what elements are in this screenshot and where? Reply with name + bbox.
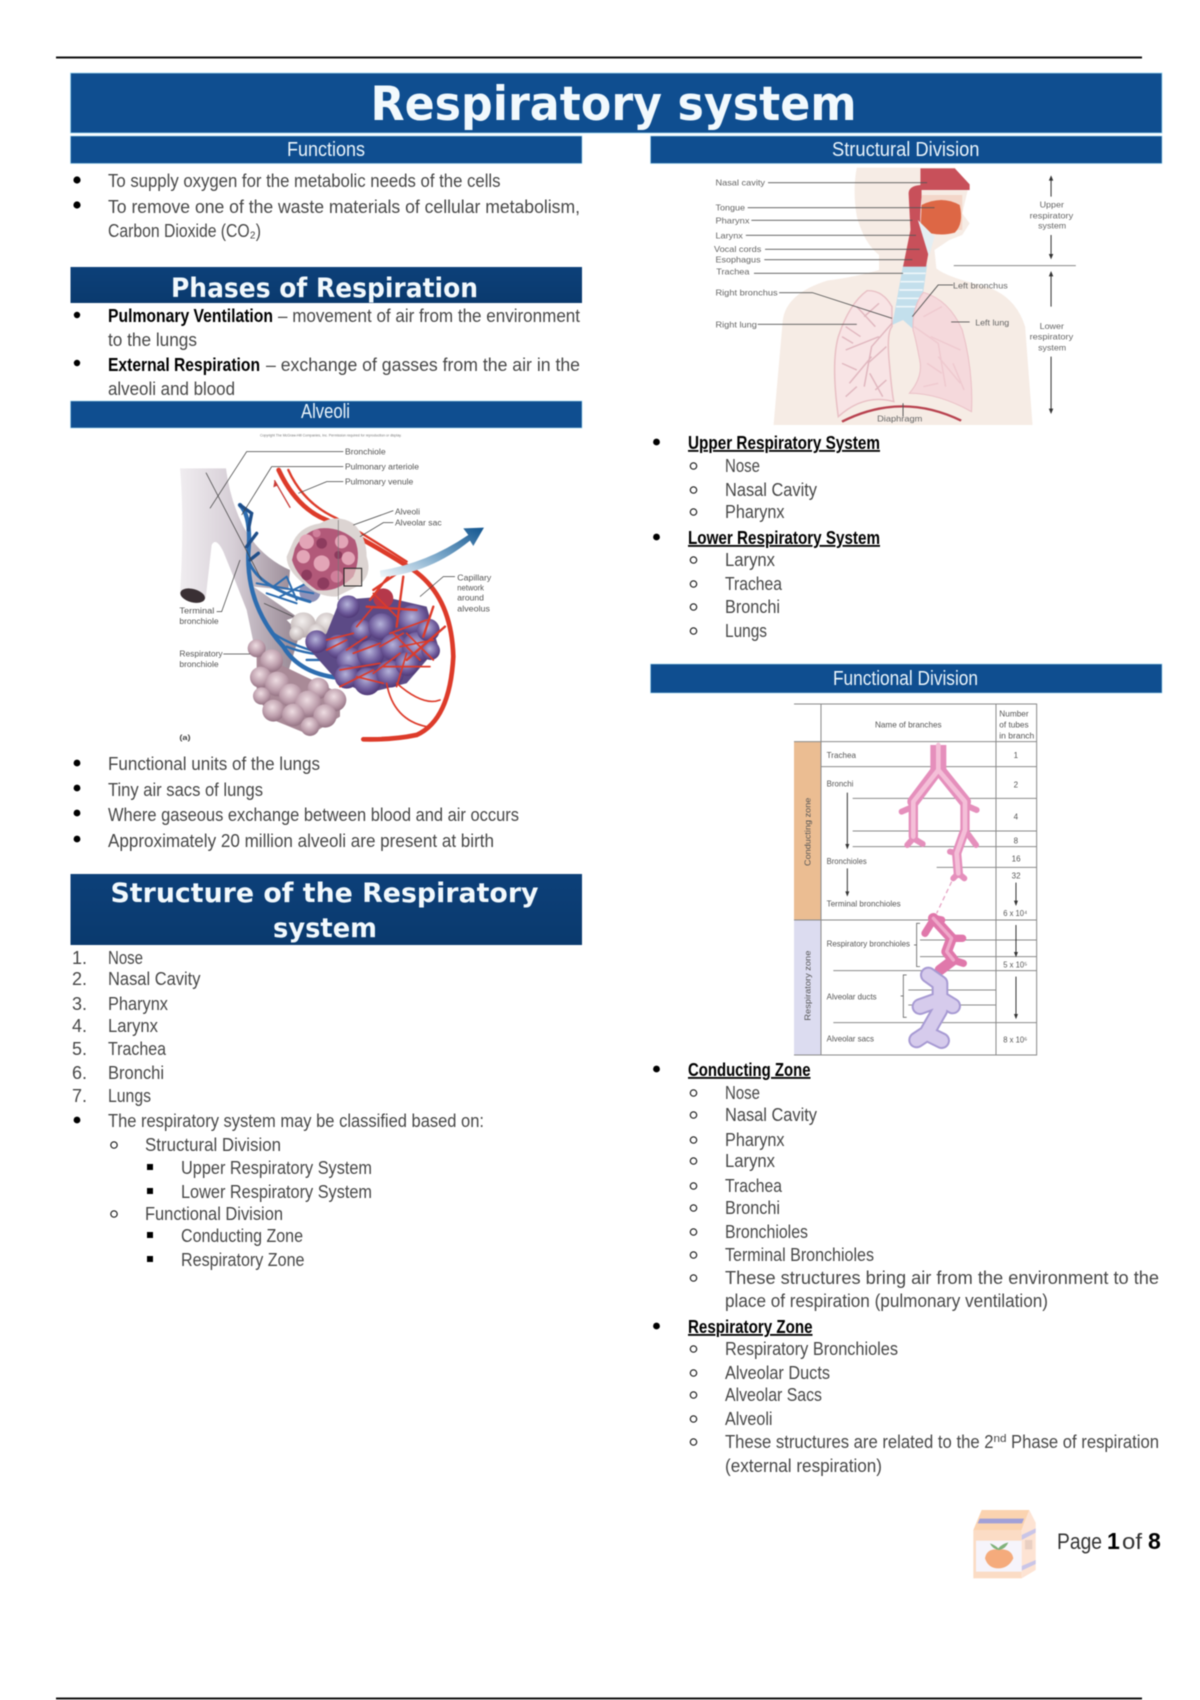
diagram labels: Vocal cords: [714, 244, 762, 254]
numbered list of organs: Nasal Cavity: [108, 969, 200, 989]
conducting zone list: place of respiration (pulmonary ventilation): [725, 1291, 1048, 1311]
respiratory zone list: These structures are related to the 2: [725, 1432, 994, 1452]
table labels: in branch: [999, 731, 1034, 740]
upper and lower respiratory system list: [653, 433, 880, 641]
conducting zone list: Trachea: [725, 1176, 783, 1196]
upper and lower respiratory system list: Nose: [725, 456, 760, 476]
numbered list of organs: 5.: [72, 1039, 87, 1059]
numbered list of organs: 1.: [72, 948, 87, 968]
panel: phases of respiration: [70, 267, 582, 399]
conducting zone list: Pharynx: [725, 1130, 784, 1150]
diagram labels: Left lung: [975, 318, 1009, 327]
panel: functional division: [650, 664, 1162, 1476]
diagram labels: Left bronchus: [953, 281, 1008, 291]
alveoli bullet list: Approximately 20 million alveoli are present at birth: [108, 831, 494, 851]
panel: functions: [70, 136, 582, 241]
table labels: 32: [1012, 872, 1021, 881]
light alveolar sac: [289, 581, 353, 643]
numbered list of organs: 2.: [72, 969, 87, 989]
table labels: 6 x 10⁴: [1003, 909, 1028, 918]
diagram labels: [714, 178, 1074, 423]
leader lines: [206, 452, 455, 654]
numbered list of organs: Bronchi: [108, 1063, 164, 1083]
table labels: 2: [1014, 780, 1019, 789]
alveoli bullet list: Where gaseous exchange between blood and air occurs: [108, 805, 519, 825]
heading: alveoli: [70, 401, 582, 428]
diagram labels: (a): [179, 733, 191, 742]
respiratory zone list: Alveolar Ducts: [725, 1363, 830, 1383]
table labels: 8 x 10⁶: [1003, 1036, 1027, 1045]
table labels: Alveolar sacs: [827, 1034, 875, 1044]
diagram labels: Upper: [1040, 200, 1064, 210]
conducting zone list: Larynx: [725, 1151, 775, 1171]
heading: structural division: Structural Division: [832, 139, 980, 161]
diagram labels: respiratory: [1030, 332, 1074, 341]
diagram labels: Tongue: [715, 203, 745, 212]
respiratory zone list: Alveoli: [725, 1409, 772, 1429]
heading: structure of the respiratory system: Structure of the Respiratory: [110, 878, 539, 909]
table labels: 5 x 10⁵: [1003, 960, 1027, 969]
capillary covered alveoli: [305, 588, 440, 695]
classification outline: Respiratory Zone: [181, 1250, 304, 1270]
respiratory zone list: Respiratory Zone: [688, 1317, 812, 1337]
heading: functional division: Functional Division: [833, 668, 978, 690]
diagram labels: Lower: [1040, 321, 1064, 331]
table labels: Name of branches: [875, 720, 942, 730]
table labels: Respiratory bronchioles: [827, 939, 911, 949]
upper and lower respiratory system list: Upper Respiratory System: [688, 433, 880, 453]
diagram labels: Alveolar sac: [395, 519, 442, 528]
diagram labels: Esophagus: [715, 255, 761, 264]
bottom page rule: [56, 1698, 1142, 1700]
table labels: Respiratory zone: [804, 950, 813, 1021]
functions bullet list: [73, 171, 580, 241]
diagram labels: [179, 448, 491, 742]
diagram labels: Pulmonary arteriole: [345, 463, 420, 472]
phases bullet list: alveoli and blood: [108, 379, 235, 399]
upper and lower respiratory system list: Larynx: [725, 550, 775, 570]
phases bullet list: External Respiration: [108, 355, 260, 375]
diagram labels: around: [457, 594, 484, 603]
numbered list of organs: Pharynx: [108, 994, 168, 1014]
diagram labels: Respiratory: [179, 649, 223, 658]
diagram labels: Right bronchus: [715, 288, 778, 298]
heading: structure of the respiratory system: [70, 874, 582, 945]
upper and lower respiratory system list: Nasal Cavity: [725, 480, 817, 500]
diagram labels: Diaphragm: [877, 414, 923, 423]
diagram labels: Pulmonary venule: [345, 478, 414, 487]
upper and lower respiratory system list: Pharynx: [725, 502, 784, 522]
title banner: [70, 73, 1162, 133]
heading: functions: [70, 136, 582, 164]
diagram: alveoli anatomy: [179, 433, 491, 742]
table labels: Bronchioles: [827, 856, 867, 866]
conducting zone list: Bronchi: [725, 1198, 780, 1218]
diagram labels: Alveoli: [395, 508, 420, 517]
diagram labels: Capillary: [457, 574, 491, 583]
page number: [1057, 1528, 1161, 1554]
diagram labels: Trachea: [716, 267, 750, 277]
respiratory zone list: Alveolar Sacs: [725, 1385, 822, 1405]
alveoli bullet list: Tiny air sacs of lungs: [108, 780, 263, 800]
diagram labels: Pharynx: [715, 216, 750, 225]
diagram labels: bronchiole: [179, 660, 219, 669]
table labels: 8: [1014, 836, 1019, 845]
classification outline: The respiratory system may be classified based on:: [108, 1111, 484, 1131]
gas exchange arrow: [380, 528, 484, 577]
heading: phases of respiration: [70, 267, 582, 304]
respiratory zone list: (external respiration): [725, 1456, 882, 1476]
conducting zone list: Terminal Bronchioles: [725, 1245, 874, 1265]
heading: structural division: [650, 136, 1162, 164]
table labels: [804, 710, 1034, 1045]
respiratory zone list: Phase of respiration: [1011, 1432, 1159, 1452]
upper and lower respiratory system list: Lower Respiratory System: [688, 528, 880, 548]
functions bullet list: To remove one of the waste materials of cellular metabolism,: [108, 197, 580, 217]
numbered list of organs: 3.: [72, 994, 87, 1014]
conducting zone list: Nasal Cavity: [725, 1105, 817, 1125]
numbered list of organs: Larynx: [108, 1016, 158, 1036]
panel: alveoli: [70, 401, 582, 851]
classification outline: Lower Respiratory System: [181, 1182, 372, 1202]
pink alveolar cluster: [248, 639, 346, 736]
table labels: 16: [1012, 854, 1021, 863]
numbered list of organs: Nose: [108, 948, 143, 968]
alveoli bullet list: [74, 754, 519, 851]
diagram labels: Nasal cavity: [715, 178, 765, 188]
respiratory bronchioles: [925, 918, 963, 970]
diagram labels: Larynx: [715, 231, 743, 240]
diagram labels: system: [1038, 221, 1067, 231]
diagram labels: Right lung: [715, 320, 757, 329]
table diagram: branching airway zones: [794, 704, 1037, 1055]
blue pulmonary arteriole: [240, 505, 393, 678]
diagram labels: Bronchiole: [345, 448, 386, 457]
alveoli bullet list: Functional units of the lungs: [108, 754, 320, 774]
page number: Page: [1057, 1529, 1102, 1554]
classification outline: Conducting Zone: [181, 1226, 303, 1246]
table labels: Conducting zone: [804, 797, 813, 866]
sectioned alveolar sac: [287, 518, 369, 600]
diagram labels: Terminal: [179, 606, 215, 615]
diagram: upper and lower respiratory tract: [714, 168, 1076, 425]
classification outline: Structural Division: [145, 1135, 281, 1155]
diagram: alveoli anatomy: Copyright The McGraw-Hill Companies, Inc. Permission required for reproduction or display.: [260, 433, 402, 438]
table labels: 4: [1014, 812, 1019, 821]
trachea: [892, 265, 927, 330]
table labels: Number: [999, 710, 1029, 719]
conducting zone list: [653, 1060, 1159, 1311]
table grid: [794, 704, 1037, 1055]
phases bullet list: – exchange of gasses from the air in the: [266, 355, 580, 375]
heading: alveoli: Alveoli: [301, 401, 350, 423]
table labels: Alveolar ducts: [827, 991, 877, 1001]
bracket marks and arrows: [901, 923, 920, 1017]
left lung: [909, 292, 972, 412]
diagram labels: alveolus: [457, 604, 490, 613]
upper and lower respiratory system list: Trachea: [725, 574, 783, 594]
phases bullet list: – movement of air from the environment: [278, 306, 580, 326]
leader lines: [746, 183, 970, 417]
conducting zone list: Bronchioles: [725, 1222, 808, 1242]
phases bullet list: Pulmonary Ventilation: [108, 306, 273, 326]
upper and lower respiratory system list: Lungs: [725, 621, 767, 641]
respiratory zone list: nd: [994, 1433, 1006, 1445]
phases bullet list: to the lungs: [108, 330, 197, 350]
table labels: Terminal bronchioles: [827, 899, 901, 909]
numbered list of organs: 4.: [72, 1016, 87, 1036]
conducting airway tree: [902, 745, 977, 878]
respiratory zone list: [653, 1317, 1159, 1476]
icon: peach milk carton: [973, 1510, 1036, 1578]
heading: structure of the respiratory system: system: [273, 913, 377, 944]
heading: functional division: [650, 664, 1162, 693]
mouth and tongue: [922, 195, 962, 230]
table labels: Bronchi: [827, 779, 853, 789]
table labels: 1: [1014, 751, 1019, 760]
numbered list of organs: 7.: [72, 1086, 87, 1106]
right lung: [835, 291, 894, 417]
table labels: Trachea: [827, 750, 856, 760]
panel: structural division: [650, 136, 1162, 641]
top page rule: [56, 56, 1142, 58]
numbered list of organs: Lungs: [108, 1086, 151, 1106]
numbered list of organs: [72, 948, 200, 1106]
body silhouette: [774, 168, 1033, 425]
classification outline: [74, 1111, 484, 1270]
upper and lower respiratory system list: Bronchi: [725, 597, 780, 617]
title banner: Respiratory system: [370, 77, 856, 132]
system arrows: [1050, 177, 1053, 412]
conducting zone list: These structures bring air from the environment to the: [725, 1268, 1159, 1288]
diaphragm: [842, 406, 961, 422]
phases bullet list: [74, 306, 580, 399]
numbered list of organs: 6.: [72, 1063, 87, 1083]
classification outline: Functional Division: [145, 1204, 283, 1224]
nasal cavity and pharynx: [903, 168, 970, 267]
functions bullet list: Carbon Dioxide (CO₂): [108, 221, 261, 241]
alveolar ducts and sacs: [917, 975, 953, 1041]
heading: phases of respiration: Phases of Respiration: [171, 273, 478, 304]
conducting zone list: Conducting Zone: [688, 1060, 810, 1080]
diagram labels: bronchiole: [179, 617, 219, 626]
page number: of: [1122, 1529, 1143, 1554]
panel: structure of the respiratory system: [70, 874, 582, 1270]
diagram labels: system: [1038, 343, 1067, 353]
classification outline: Upper Respiratory System: [181, 1158, 372, 1178]
conducting zone list: Nose: [725, 1083, 760, 1103]
numbered list of organs: Trachea: [108, 1039, 167, 1059]
respiratory zone list: Respiratory Bronchioles: [725, 1339, 898, 1359]
page number: 8: [1148, 1528, 1161, 1554]
heading: functions: Functions: [287, 139, 365, 161]
red capillaries and pulmonary venule: [273, 470, 453, 739]
table labels: of tubes: [999, 721, 1029, 730]
bronchiole tube: [180, 468, 300, 677]
diagram labels: network: [457, 584, 484, 593]
diagram labels: respiratory: [1030, 211, 1074, 221]
functions bullet list: To supply oxygen for the metabolic needs of the cells: [108, 171, 500, 191]
page number: 1: [1107, 1528, 1120, 1554]
